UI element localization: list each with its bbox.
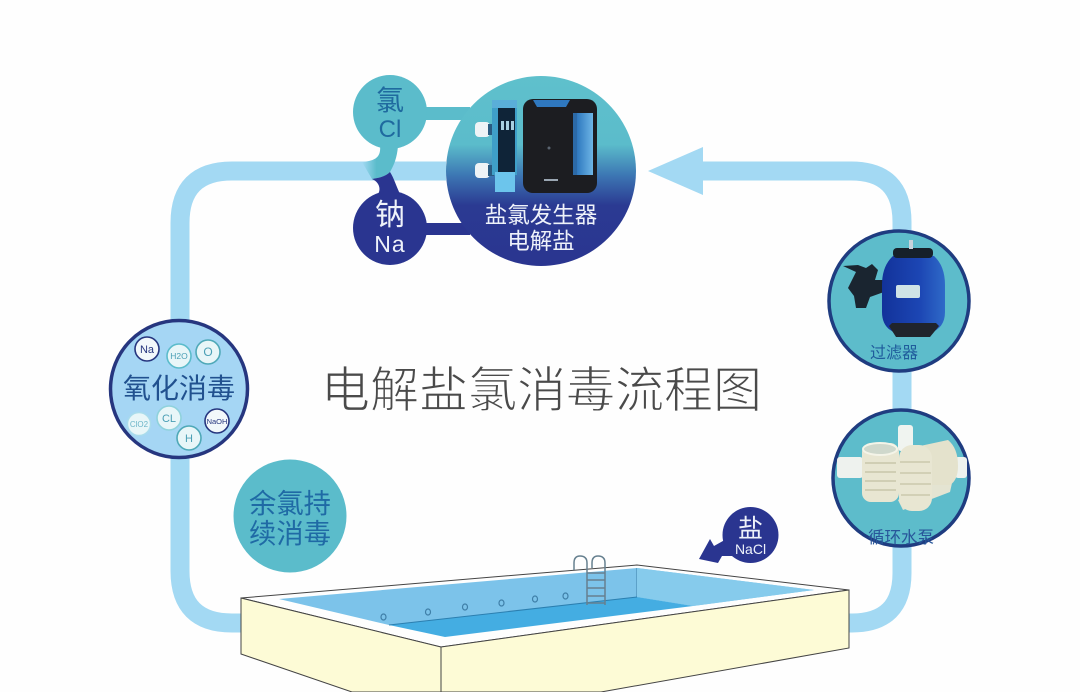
molecule: H: H <box>185 433 193 445</box>
swimming pool <box>241 556 849 692</box>
icon: generator control box <box>523 99 597 193</box>
salt chlorine generator circle <box>446 76 636 266</box>
circulation pipe: right branch from pool to generator with arrow <box>648 147 902 623</box>
pool lights <box>381 593 568 620</box>
oxidation disinfection circle: 氧化消毒 <box>123 373 235 404</box>
icon: electrolytic cell <box>475 100 517 192</box>
pool back walls <box>279 568 814 625</box>
pool deck <box>241 565 849 647</box>
circulation pipe: left branch from generator to pool <box>180 171 446 623</box>
salt NaCl marker with arrow: 盐 <box>738 515 763 543</box>
salt chlorine generator circle: 电解盐 <box>507 229 575 254</box>
chlorine node: Cl <box>379 116 401 143</box>
filter circle <box>829 231 969 371</box>
arrow head <box>648 147 703 195</box>
residual chlorine circle: 余氯持 <box>249 488 331 519</box>
molecule: O: O <box>203 345 213 359</box>
title: 电解盐氯消毒流程图 <box>321 364 762 418</box>
molecule: H2O: H2O <box>170 351 188 361</box>
chlorine node: 氯 <box>376 85 404 116</box>
oxidation disinfection circle <box>110 320 248 458</box>
circulation pump circle: 循环水泵 <box>868 528 934 547</box>
chlorine node <box>353 75 470 179</box>
pool right wall <box>441 590 849 692</box>
sodium node <box>353 172 470 265</box>
molecule: NaOH: NaOH <box>207 417 227 426</box>
molecule: ClO2: ClO2 <box>130 420 149 429</box>
pool floor <box>389 597 693 637</box>
pool left wall <box>241 598 441 692</box>
sodium node: Na <box>374 231 406 257</box>
molecule: Na: Na <box>140 344 155 356</box>
icon: sand filter <box>843 240 945 337</box>
sodium node: 钠 <box>375 199 405 232</box>
icon: pump <box>837 425 967 511</box>
circulation pump circle <box>833 410 969 547</box>
pool ladder <box>574 556 605 605</box>
residual chlorine circle <box>234 460 346 572</box>
filter circle: 过滤器 <box>870 344 918 362</box>
molecule: CL: CL <box>162 413 176 425</box>
salt chlorine generator circle: 盐氯发生器 <box>485 203 597 228</box>
salt NaCl marker with arrow <box>699 507 778 563</box>
residual chlorine circle: 续消毒 <box>249 518 331 549</box>
salt NaCl marker with arrow: NaCl <box>735 541 766 557</box>
